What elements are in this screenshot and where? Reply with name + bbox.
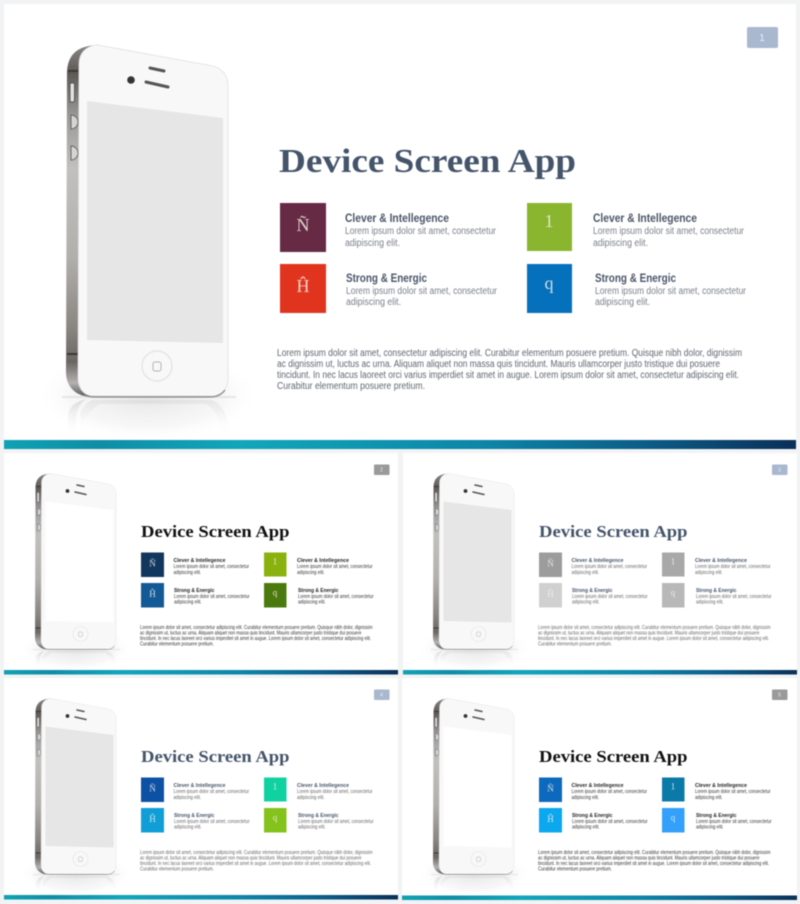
phone mockup [418, 474, 530, 672]
paragraph: Curabitur elementum posuere pretium. [277, 381, 425, 392]
feature 3: adipiscing elit. [174, 600, 202, 606]
feature 1: adipiscing elit. [572, 795, 599, 801]
panel: blue and teal variant [4, 678, 398, 900]
feature 2: adipiscing elit. [297, 795, 324, 801]
paragraph: Lorem ipsum dolor sit amet, consectetur adipiscing elit. Curabitur elementum posuere pretium. Quisque nibh dolor, dignissim [140, 625, 372, 631]
feature 1 [280, 203, 497, 252]
feature 4: adipiscing elit. [696, 824, 724, 830]
feature 2 [264, 778, 373, 802]
feature 1: Clever & Intellegence [174, 783, 226, 789]
phone mockup [36, 45, 260, 441]
feature 2: 1 [273, 556, 277, 566]
paragraph: Lorem ipsum dolor sit amet, consectetur adipiscing elit. Curabitur elementum posuere pretium. Quisque nibh dolor, dignissim [140, 850, 372, 856]
paragraph [538, 625, 770, 648]
paragraph: ac dignissim ut, luctus ac urna. Aliquam aliquet non massa quis tincidunt. Mauris ullamcorper justo tristique dui posuere [538, 630, 760, 636]
feature 2: Clever & Intellegence [593, 213, 697, 225]
paragraph: Curabitur elementum posuere pretium. [538, 642, 612, 648]
feature 2: Lorem ipsum dolor sit amet, consectetur [297, 789, 373, 795]
feature 3: Strong & Energic [572, 813, 613, 819]
feature 2: Clever & Intellegence [695, 783, 747, 789]
feature 1: Lorem ipsum dolor sit amet, consectetur [174, 789, 249, 795]
panel: bright blue variant [402, 678, 797, 900]
title: Device Screen App [539, 522, 688, 541]
feature 1: Lorem ipsum dolor sit amet, consectetur [174, 564, 249, 570]
feature 1: Ñ [149, 558, 156, 568]
feature 3: Lorem ipsum dolor sit amet, consectetur [346, 286, 498, 297]
paragraph: tincidunt. In nec lacus laoreet orci varius imperdiet sit amet in augue. Lorem ipsum dolor sit amet, consectetur adipiscing elit. [140, 636, 371, 642]
feature 2: 1 [671, 782, 675, 792]
feature 3 [280, 264, 498, 313]
title: Device Screen App [141, 747, 290, 766]
feature 2: Clever & Intellegence [695, 558, 747, 564]
feature 2 [264, 552, 373, 576]
feature 2: adipiscing elit. [297, 570, 324, 576]
feature 3: adipiscing elit. [174, 824, 202, 830]
feature 4 [264, 808, 374, 832]
paragraph [140, 850, 372, 872]
feature 4: q [273, 588, 278, 598]
feature 4: Lorem ipsum dolor sit amet, consectetur [595, 286, 747, 297]
feature 2: 1 [273, 782, 277, 792]
feature 4: Lorem ipsum dolor sit amet, consectetur [298, 819, 374, 825]
feature 2 [662, 778, 771, 802]
page number badge: 5 [778, 692, 781, 698]
paragraph: ac dignissim ut, luctus ac urna. Aliquam aliquet non massa quis tincidunt. Mauris ullamcorper justo tristique dui posuere [140, 856, 362, 862]
feature 1: Clever & Intellegence [572, 783, 624, 789]
feature 1: Clever & Intellegence [174, 558, 226, 564]
title: Device Screen App [279, 143, 576, 180]
feature 1: adipiscing elit. [345, 238, 400, 249]
feature 2: adipiscing elit. [695, 795, 722, 801]
paragraph: Curabitur elementum posuere pretium. [140, 866, 214, 872]
bottom gradient bar [402, 896, 797, 900]
paragraph [140, 625, 372, 648]
feature 3: Strong & Energic [572, 588, 613, 594]
panel: grayscale variant [403, 453, 797, 674]
page number badge [374, 690, 390, 700]
title: Device Screen App [539, 747, 688, 766]
bottom gradient bar [4, 670, 398, 674]
feature 3: Ĥ [547, 814, 554, 824]
feature 3 [141, 808, 250, 832]
bottom gradient bar [403, 670, 797, 674]
panel: dark navy and green variant [4, 453, 398, 674]
panel: main slide [4, 4, 796, 449]
feature 4: adipiscing elit. [298, 824, 326, 830]
feature 2: Lorem ipsum dolor sit amet, consectetur [297, 564, 373, 570]
feature 3: Ĥ [296, 275, 310, 296]
phone mockup [418, 698, 530, 896]
feature 3: Lorem ipsum dolor sit amet, consectetur [572, 819, 648, 825]
feature 1: Lorem ipsum dolor sit amet, consectetur [572, 564, 647, 570]
feature 1: adipiscing elit. [572, 570, 599, 576]
feature 4: q [671, 812, 676, 822]
feature 1 [141, 552, 249, 577]
page number badge: 1 [759, 33, 765, 44]
feature 3 [539, 808, 648, 832]
feature 1: Lorem ipsum dolor sit amet, consectetur [345, 226, 497, 237]
feature 3: Ĥ [149, 814, 156, 824]
feature 1: adipiscing elit. [174, 570, 201, 576]
feature 2: Lorem ipsum dolor sit amet, consectetur [695, 564, 771, 570]
phone mockup [20, 474, 132, 672]
feature 2 [662, 552, 771, 576]
feature 3: Strong & Energic [174, 813, 215, 819]
feature 3: adipiscing elit. [346, 297, 401, 308]
feature 4: Strong & Energic [298, 813, 339, 819]
feature 4: Lorem ipsum dolor sit amet, consectetur [696, 594, 772, 600]
paragraph: ac dignissim ut, luctus ac urna. Aliquam aliquet non massa quis tincidunt. Mauris ullamcorper justo tristique dui posuere [140, 630, 362, 636]
page number badge [374, 464, 390, 475]
page number badge: 2 [380, 468, 383, 474]
paragraph [538, 850, 770, 872]
page number badge [772, 464, 788, 475]
feature 1 [141, 778, 249, 802]
paragraph: Curabitur elementum posuere pretium. [538, 866, 612, 872]
feature 4 [527, 264, 747, 313]
feature 4: Strong & Energic [595, 273, 677, 285]
feature 1: Clever & Intellegence [345, 213, 449, 225]
page number badge [772, 690, 788, 700]
feature 4: adipiscing elit. [298, 600, 326, 606]
feature 2: adipiscing elit. [695, 570, 722, 576]
feature 1: adipiscing elit. [174, 795, 201, 801]
paragraph [277, 348, 742, 392]
paragraph: tincidunt. In nec lacus laoreet orci varius imperdiet sit amet in augue. Lorem ipsum dolor sit amet, consectetur adipiscing elit. [140, 861, 371, 867]
feature 1 [539, 778, 647, 802]
feature 2: adipiscing elit. [593, 238, 648, 249]
feature 4 [264, 583, 374, 608]
feature 2: Clever & Intellegence [297, 558, 349, 564]
feature 4: q [544, 273, 554, 293]
feature 3: Ĥ [547, 589, 554, 599]
feature 2: Clever & Intellegence [297, 783, 349, 789]
feature 3 [141, 583, 250, 608]
paragraph: ac dignissim ut, luctus ac urna. Aliquam aliquet non massa quis tincidunt. Mauris ullamcorper justo tristique dui posuere [538, 856, 760, 862]
feature 1: Ñ [149, 784, 156, 794]
feature 3: Lorem ipsum dolor sit amet, consectetur [174, 819, 250, 825]
feature 1: Lorem ipsum dolor sit amet, consectetur [572, 789, 647, 795]
page number badge: 4 [380, 692, 383, 698]
feature 3: Strong & Energic [174, 588, 215, 594]
page number badge: 3 [778, 468, 781, 474]
paragraph: ac dignissim ut, luctus ac urna. Aliquam aliquet non massa quis tincidunt. Mauris ullamcorper justo tristique dui posuere [277, 359, 720, 370]
feature 4 [662, 808, 772, 832]
bottom gradient bar [4, 440, 796, 449]
title: Device Screen App [141, 522, 290, 541]
feature 3: Ĥ [149, 589, 156, 599]
feature 4: Strong & Energic [696, 588, 737, 594]
feature 4: Lorem ipsum dolor sit amet, consectetur [696, 819, 772, 825]
feature 2 [527, 203, 745, 251]
feature 1: Ñ [296, 214, 310, 235]
feature 3: Lorem ipsum dolor sit amet, consectetur [174, 594, 250, 600]
feature 4: q [273, 812, 278, 822]
feature 4: Lorem ipsum dolor sit amet, consectetur [298, 594, 374, 600]
feature 4: adipiscing elit. [696, 600, 724, 606]
page number badge [747, 27, 778, 48]
feature 3: Lorem ipsum dolor sit amet, consectetur [572, 594, 648, 600]
phone mockup [20, 698, 132, 896]
feature 2: Lorem ipsum dolor sit amet, consectetur [695, 789, 771, 795]
feature 1: Ñ [547, 558, 554, 568]
feature 1 [539, 552, 647, 577]
feature 4: Strong & Energic [298, 588, 339, 594]
paragraph: Curabitur elementum posuere pretium. [140, 642, 214, 648]
feature 4: Strong & Energic [696, 813, 737, 819]
feature 2: Lorem ipsum dolor sit amet, consectetur [593, 226, 745, 237]
feature 4: q [671, 588, 676, 598]
feature 1: Ñ [547, 784, 554, 794]
feature 2: 1 [544, 211, 554, 231]
bottom gradient bar [4, 895, 398, 900]
feature 3 [539, 583, 648, 608]
feature 3: adipiscing elit. [572, 824, 600, 830]
feature 4 [662, 583, 772, 608]
feature 3: Strong & Energic [346, 273, 428, 285]
feature 1: Clever & Intellegence [572, 558, 624, 564]
feature 4: adipiscing elit. [595, 297, 650, 308]
feature 3: adipiscing elit. [572, 600, 600, 606]
feature 2: 1 [671, 556, 675, 566]
